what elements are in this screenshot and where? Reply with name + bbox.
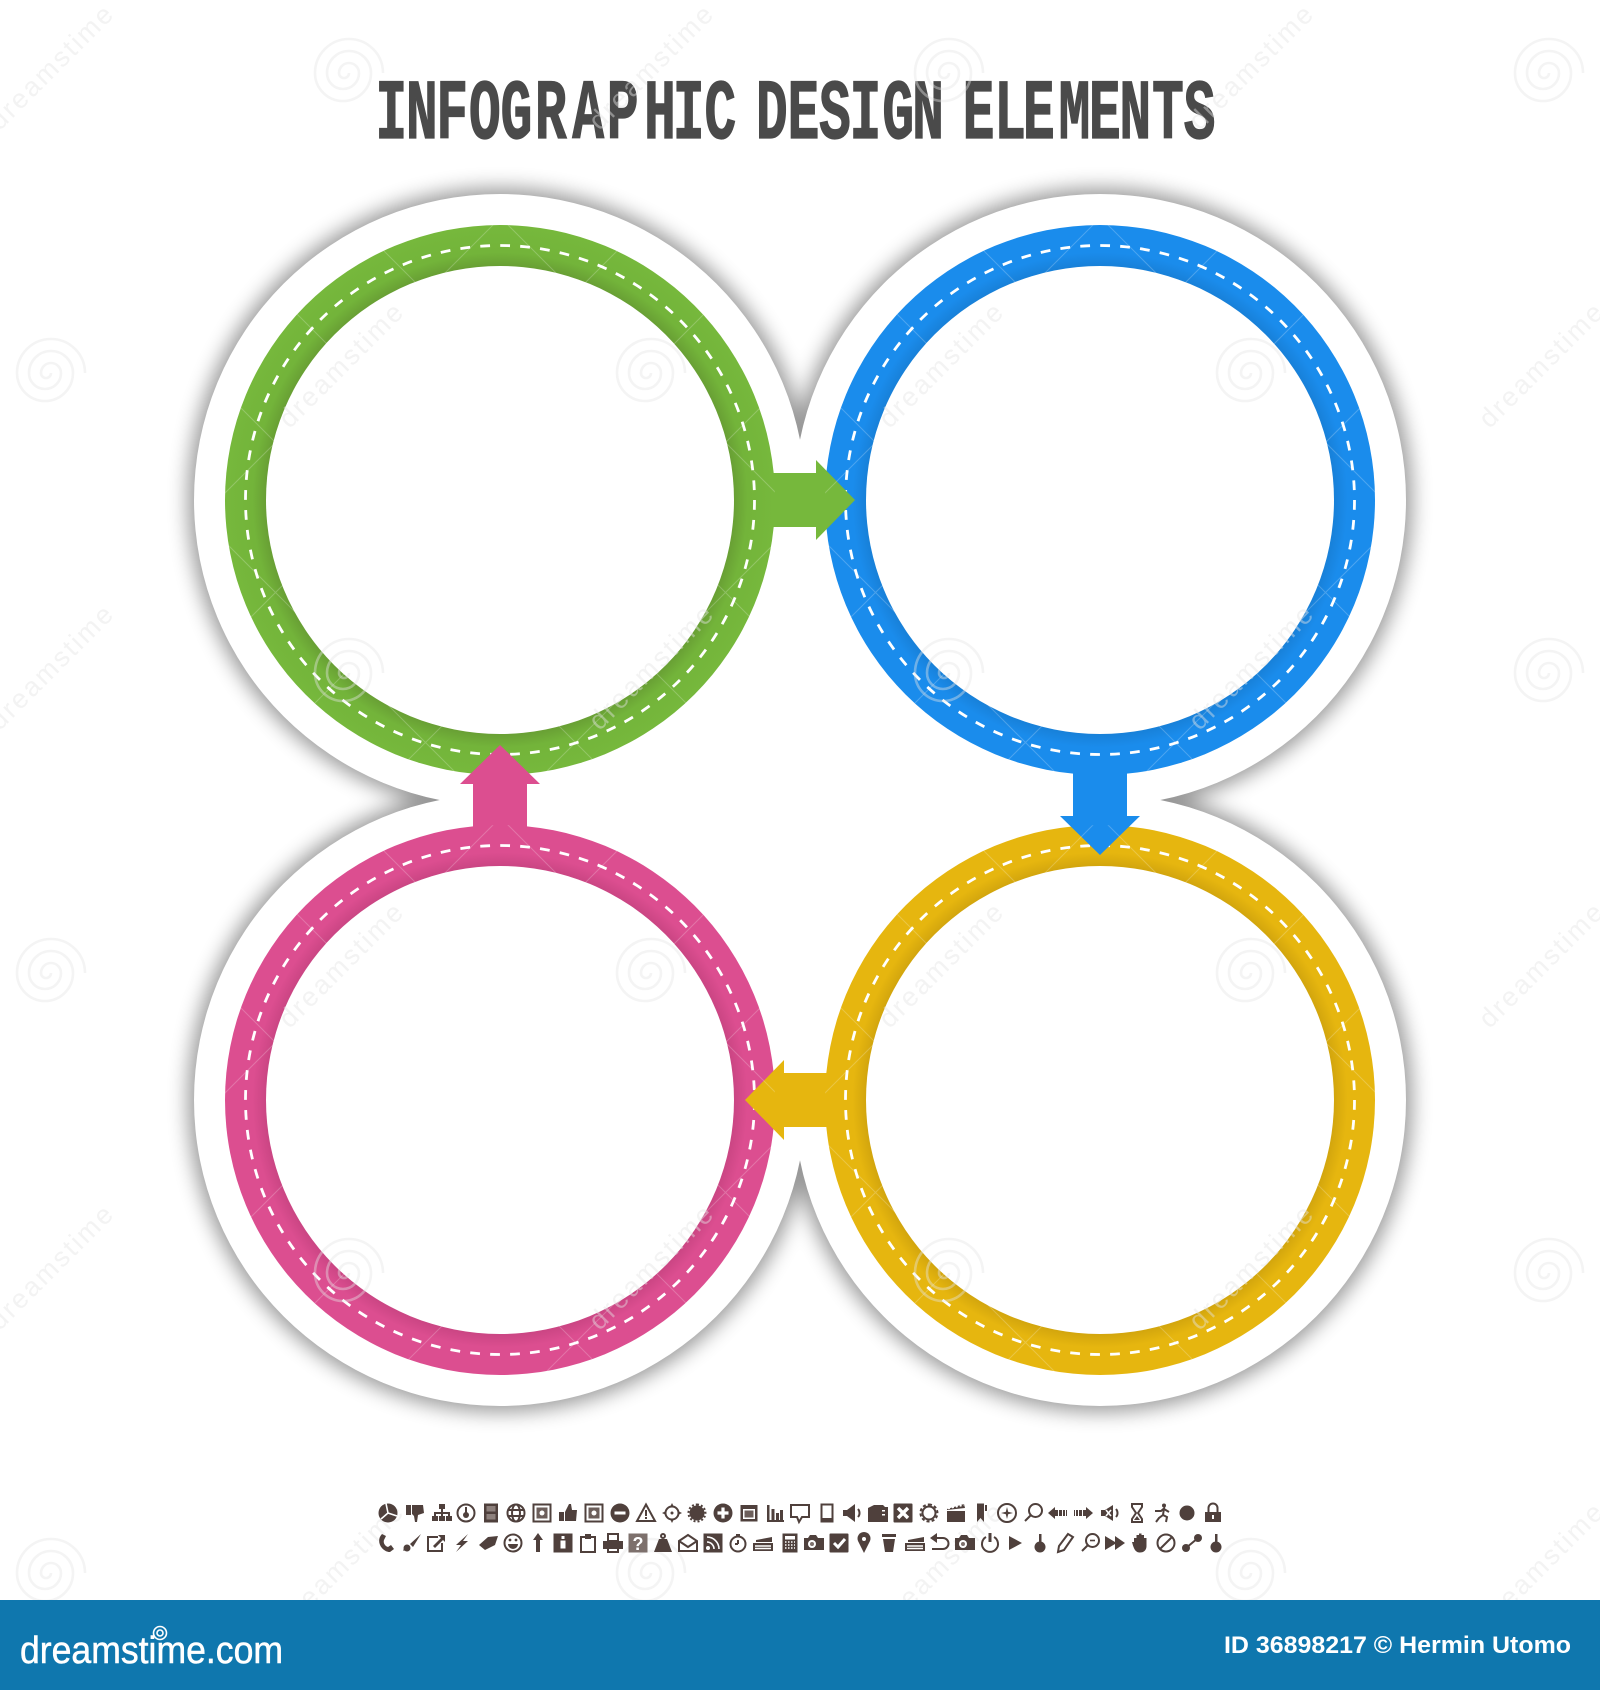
icon: question square: ? — [632, 1534, 644, 1554]
icon: speaker — [843, 1504, 860, 1522]
icon: right arrow — [1074, 1507, 1093, 1519]
icon: external link — [428, 1535, 445, 1551]
icon: dot — [1180, 1506, 1194, 1520]
watermark diagonal text: dreamstime — [1183, 0, 1321, 136]
icon: file cabinet — [484, 1504, 498, 1522]
icon: lightning bolt — [456, 1534, 468, 1552]
icon: warning triangle — [637, 1504, 655, 1521]
icon: stopwatch — [730, 1534, 746, 1552]
icon: thumbs down — [406, 1505, 424, 1522]
icon: starburst — [688, 1504, 705, 1521]
icon: question square — [628, 1534, 648, 1554]
icon: clipboard — [581, 1534, 595, 1552]
watermark diagonal text: dreamstime — [873, 1496, 1011, 1634]
icon: document stack — [905, 1537, 925, 1551]
icon: map pin — [858, 1532, 870, 1553]
icon: link — [1182, 1534, 1202, 1552]
icon: pie chart — [378, 1504, 398, 1522]
watermark diagonal text: dreamstime — [583, 598, 721, 736]
watermark lattice lines — [225, 225, 1375, 1371]
icon: paint brush — [403, 1534, 421, 1552]
icon: key — [1034, 1534, 1046, 1552]
icon: no sign — [1158, 1534, 1174, 1552]
footer bar — [0, 1600, 1600, 1690]
icon: camera 2 — [955, 1535, 975, 1550]
panel: yellow ring — [825, 825, 1375, 1375]
icon: clapperboard — [947, 1504, 965, 1522]
footer logo wordmark: dreamstime.com — [20, 1630, 283, 1672]
icon: zoom out — [1082, 1534, 1099, 1551]
icon: folder — [868, 1505, 888, 1522]
panel: pink ring — [225, 825, 775, 1375]
icon: phone handset — [379, 1534, 394, 1552]
icon: tablet — [821, 1504, 833, 1522]
panel: green ring — [225, 225, 775, 775]
watermark diagonal text: dreamstime — [583, 1198, 721, 1336]
title: INFOGRAPHIC DESIGN ELEMENTS — [375, 68, 1216, 164]
icon: hourglass — [1132, 1504, 1142, 1522]
icon: power button — [982, 1533, 998, 1552]
icon: up arrow — [533, 1533, 543, 1552]
icon: bar chart — [767, 1505, 784, 1522]
icon: gear — [920, 1504, 937, 1521]
watermark diagonal text: dreamstime — [583, 0, 721, 136]
icon: key 2 — [1210, 1534, 1222, 1552]
icon: close square — [894, 1504, 912, 1522]
watermark diagonal text: dreamstime — [1183, 1198, 1321, 1336]
icon: padlock — [1205, 1504, 1221, 1522]
icon: pencil — [1058, 1534, 1073, 1552]
icon: framed picture — [534, 1504, 550, 1522]
icon: network — [432, 1504, 452, 1521]
white backing discs — [194, 194, 1406, 1406]
watermark diagonal text: dreamstime — [873, 296, 1011, 434]
watermark diagonal text: dreamstime — [273, 296, 411, 434]
icon: framed picture 2 — [586, 1504, 602, 1522]
icon: trash can — [882, 1534, 896, 1552]
icon: speech bubble — [791, 1505, 809, 1522]
icon: calculator — [782, 1534, 798, 1552]
icon: mute speaker — [1101, 1505, 1118, 1521]
icon: left arrow — [1048, 1507, 1067, 1519]
icon: globe — [508, 1504, 524, 1522]
watermark diagonal text: dreamstime — [273, 896, 411, 1034]
arrow: pink to green — [460, 745, 540, 828]
icon: undo arrow — [930, 1533, 948, 1549]
icon row 2 — [379, 1532, 1221, 1554]
icon: hand — [1132, 1534, 1146, 1552]
icon: paper stack — [753, 1537, 773, 1551]
icon: smiley — [504, 1534, 522, 1552]
icon: fast forward — [1105, 1536, 1125, 1550]
icon: printer — [603, 1534, 623, 1552]
footer image id and credit: ID 36898217 © Hermin Utomo — [1224, 1632, 1571, 1659]
arrow: blue to yellow — [1060, 772, 1140, 855]
icon: price tag — [479, 1536, 498, 1550]
icon: thumbs up — [559, 1504, 577, 1521]
icon: info square — [554, 1534, 572, 1552]
icon: magnifier — [1025, 1504, 1042, 1521]
arrow: yellow to pink — [745, 1060, 828, 1140]
icon: gauge — [458, 1504, 474, 1522]
arrow: green to blue — [772, 460, 855, 540]
icon: play — [1009, 1536, 1022, 1550]
icon: bookmark — [977, 1504, 987, 1522]
icon: minus circle — [610, 1504, 630, 1522]
watermark diagonal text: dreamstime — [1183, 598, 1321, 736]
icon: plus circle — [714, 1504, 732, 1522]
icon: running person — [1155, 1504, 1169, 1522]
icon: calendar — [740, 1505, 758, 1522]
icon: rss — [704, 1534, 722, 1552]
panel: blue ring — [825, 225, 1375, 775]
icon: checkbox — [830, 1534, 848, 1552]
watermark diagonal text: dreamstime — [273, 1496, 411, 1634]
footer logo spiral — [154, 1626, 166, 1640]
white centre of the clover — [440, 440, 1160, 1160]
icon: crosshair — [662, 1503, 682, 1523]
soft shadow around the clover silhouette — [188, 188, 1412, 1412]
icon row 1 — [378, 1503, 1221, 1523]
icon: envelope — [679, 1535, 697, 1551]
icon: compass — [998, 1504, 1016, 1522]
icon: camera — [804, 1535, 824, 1550]
watermark diagonal text: dreamstime — [873, 896, 1011, 1034]
icon: weight — [654, 1534, 672, 1552]
